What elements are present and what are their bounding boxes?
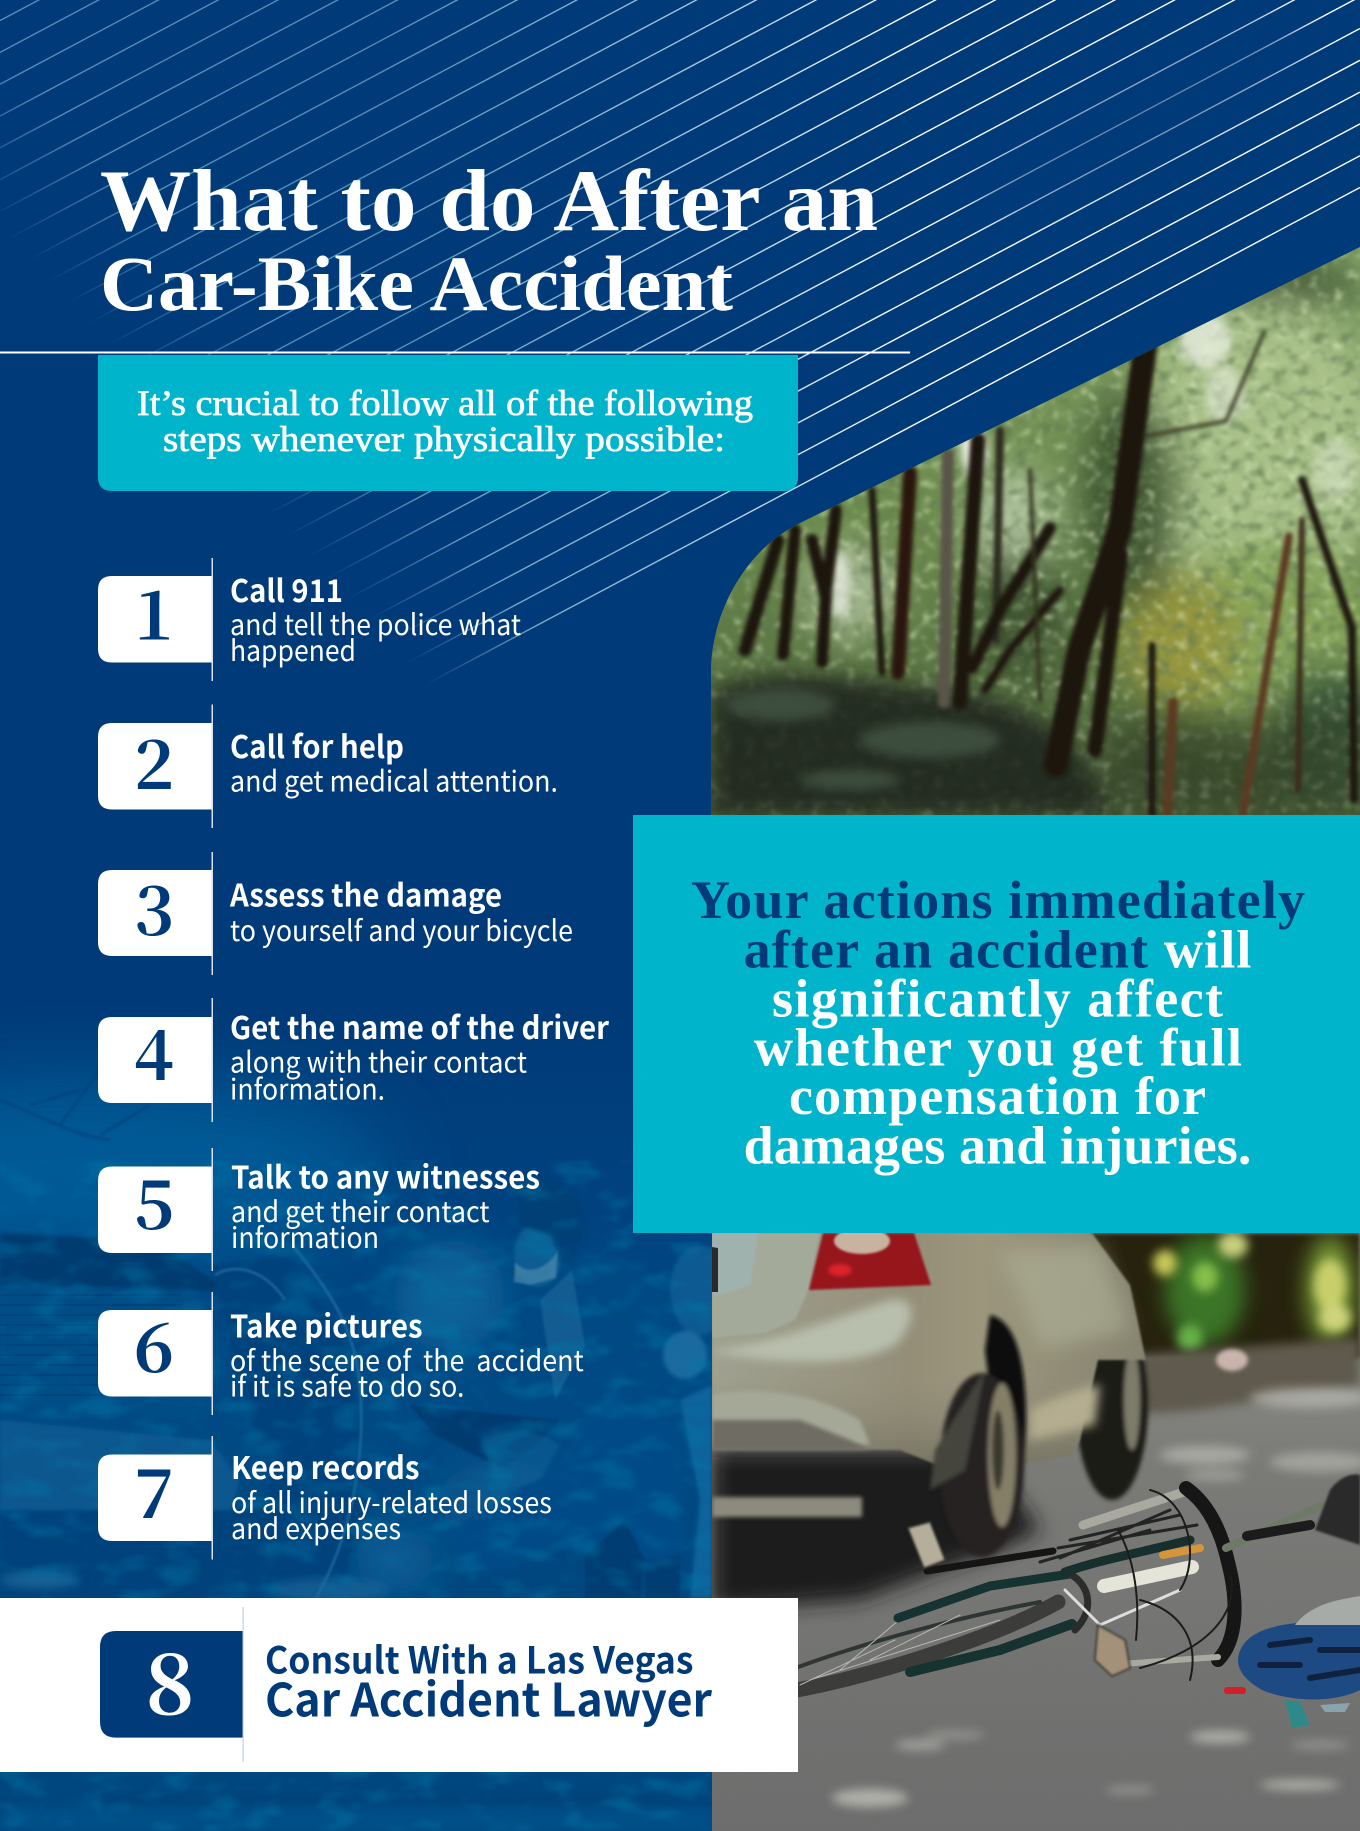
canopy light patches: [800, 267, 1360, 800]
step 3: 3: [134, 858, 174, 955]
step 2: and get medical attention.: [230, 759, 558, 801]
tail light: [809, 1233, 931, 1290]
step 5: 5: [134, 1152, 174, 1249]
step 5: [98, 1148, 540, 1271]
rear wheel: [930, 1315, 1026, 1557]
step 8: lawyer banner: Consult With a Las Vegas: [265, 1630, 694, 1684]
second person: [662, 1244, 712, 1598]
step 4: information.: [230, 1066, 385, 1108]
helmet: [1238, 1596, 1360, 1699]
debris: [1224, 1687, 1350, 1728]
leaf texture: [711, 240, 1360, 816]
fender line: [215, 1246, 361, 1598]
road light patches: [832, 1388, 1360, 1807]
step 6: 6: [134, 1295, 174, 1392]
under-car shadow: [712, 1450, 1040, 1610]
step 8: lawyer banner: [0, 1598, 798, 1772]
tree branches: [0, 1070, 150, 1140]
step 4: 4: [134, 1002, 174, 1099]
undergrowth: [711, 674, 1110, 815]
step 3: Assess the damage: [229, 870, 502, 916]
callout: your actions: whether you get full: [754, 1018, 1242, 1078]
side highlights: [1030, 1385, 1100, 1440]
title: Car-Bike Accident: [100, 240, 733, 327]
callout: your actions: damages and injuries.: [744, 1116, 1251, 1176]
step 8: lawyer banner: 8: [145, 1618, 195, 1739]
step 7: of all injury-related losses: [231, 1480, 552, 1522]
man crouching: [410, 1173, 690, 1600]
pedals: [908, 1522, 1130, 1676]
photo: car and fallen bicycle: [712, 1228, 1360, 1831]
photo: accident scene tinted blue: [0, 1000, 730, 1831]
radiator grille: [0, 1295, 182, 1395]
step 1: Call 911: [230, 566, 343, 611]
step 4: [98, 998, 609, 1122]
callout: your actions: compensation for: [789, 1066, 1206, 1126]
callout: your actions: after an accident will: [744, 920, 1251, 980]
bright sky gaps: [830, 312, 1357, 621]
step 6: [98, 1292, 584, 1415]
intro callout: It’s crucial to follow all of the following: [137, 383, 753, 423]
callout: your actions: Your actions immediately: [691, 870, 1305, 930]
photo: forest: [711, 240, 1360, 816]
trunk panel: [712, 1233, 820, 1338]
background: diagonal stripe pattern: [0, 0, 1360, 680]
ground: [0, 1572, 712, 1831]
intro callout: [98, 355, 798, 491]
step 6: if it is safe to do so.: [230, 1364, 464, 1406]
step 3: [98, 852, 573, 975]
callout: your actions: [633, 815, 1360, 1233]
step 4: along with their contact: [230, 1040, 527, 1082]
bumper highlight: [712, 1299, 911, 1362]
step 7: 7: [134, 1441, 174, 1538]
step 1: [98, 558, 521, 681]
car body: [712, 1233, 1146, 1470]
step 1: 1: [134, 562, 174, 660]
step 8: lawyer banner: Car Accident Lawyer: [265, 1665, 713, 1731]
roadside dirt: [1130, 1338, 1360, 1415]
step 7: [98, 1436, 552, 1560]
header rule: [0, 352, 910, 354]
step 3: to yourself and your bicycle: [230, 908, 573, 950]
step 5: Talk to any witnesses: [231, 1152, 540, 1198]
step 4: Get the name of the driver: [230, 1003, 609, 1048]
tree background: [1090, 1232, 1360, 1415]
title: [100, 153, 878, 327]
step 1: happened: [230, 628, 356, 670]
tree trunks: [745, 332, 1354, 815]
bicycle: [785, 1488, 1323, 1692]
step 7: and expenses: [231, 1506, 401, 1548]
step 1: and tell the police what: [230, 602, 521, 644]
wrecked car hood: [0, 1232, 356, 1572]
lighter foliage behind man: [354, 1232, 522, 1594]
photo mottling: [0, 1160, 712, 1831]
under-car light strip: [712, 1497, 862, 1517]
step 2: 2: [134, 712, 174, 809]
saddle: [1315, 1474, 1360, 1545]
callout: your actions: significantly affect: [772, 968, 1223, 1028]
step 6: Take pictures: [230, 1302, 423, 1346]
intro callout: steps whenever physically possible:: [163, 419, 725, 459]
title: What to do After an: [100, 153, 878, 250]
step 5: information: [231, 1215, 379, 1257]
step 5: and get their contact: [231, 1189, 490, 1231]
step 7: Keep records: [231, 1443, 420, 1488]
front wheel: [1077, 1358, 1151, 1503]
step 2: Call for help: [230, 722, 404, 767]
step 2: [98, 704, 558, 828]
step 6: of the scene of the accident: [230, 1338, 584, 1380]
